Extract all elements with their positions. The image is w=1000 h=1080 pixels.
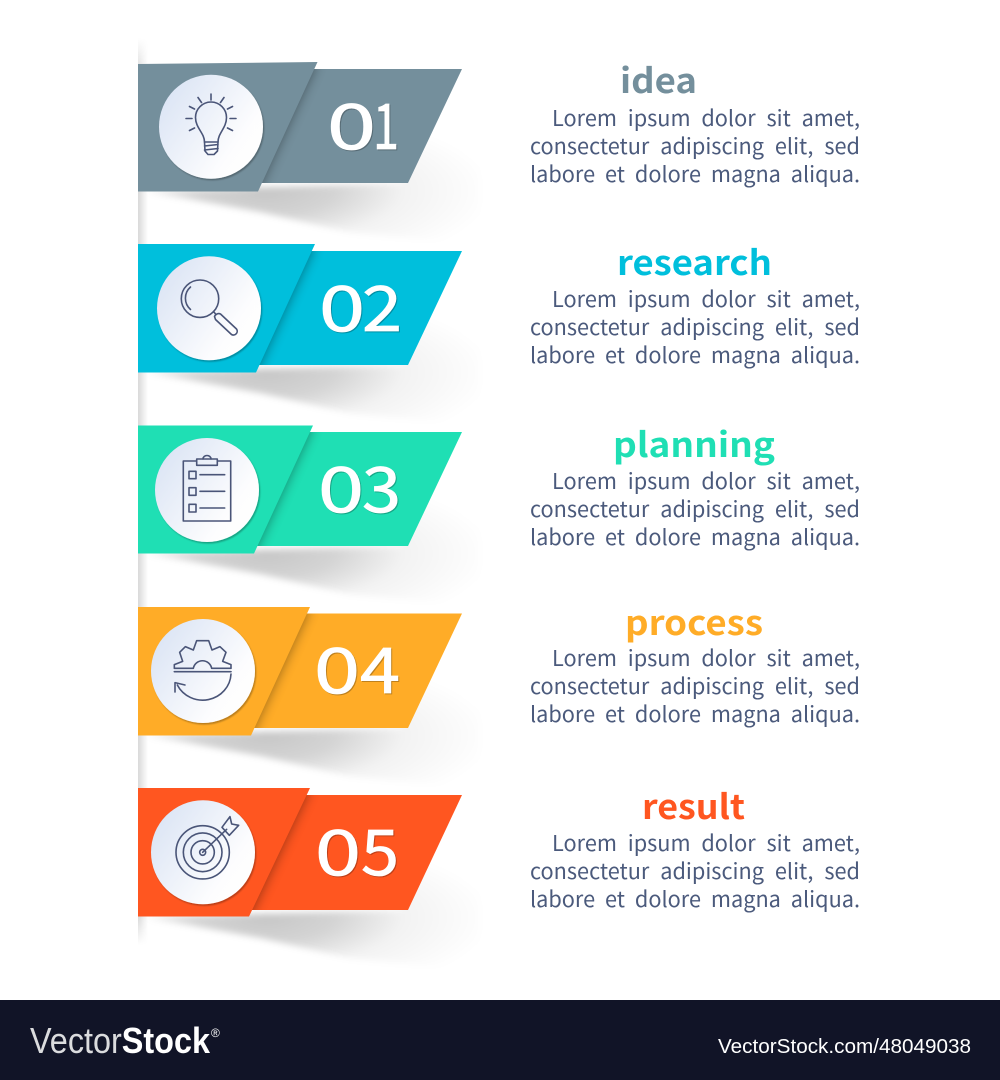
icon: clipboard checklist bbox=[183, 456, 231, 521]
panel: step 05 result bbox=[138, 788, 859, 958]
registered mark: ® bbox=[211, 1026, 220, 1040]
heading: research: research bbox=[617, 236, 772, 285]
fold shadow 01 bbox=[262, 69, 320, 183]
front band 04 bbox=[138, 607, 310, 736]
icon: gear with cycle arrow bbox=[174, 641, 231, 700]
number 04 bbox=[314, 621, 400, 712]
text block 03 bbox=[530, 466, 860, 550]
number 02: 0 bbox=[319, 259, 365, 350]
cast shadow 01 bbox=[145, 125, 480, 245]
panel: step 01 idea bbox=[138, 62, 859, 232]
icon disc 02 bbox=[157, 256, 261, 360]
number 03: 3 bbox=[362, 440, 401, 531]
cast shadow 02 bbox=[145, 307, 480, 426]
text block 05: consectetur adipiscing elit, sed bbox=[530, 854, 860, 886]
text block 02: consectetur adipiscing elit, sed bbox=[530, 310, 860, 342]
front band 03 bbox=[138, 426, 313, 554]
text block 01 bbox=[530, 104, 860, 188]
text block 04: consectetur adipiscing elit, sed bbox=[530, 670, 860, 700]
back band 05 bbox=[240, 795, 462, 910]
number 03 bbox=[318, 440, 401, 531]
text block 01: consectetur adipiscing elit, sed bbox=[530, 130, 860, 160]
text block 04 bbox=[530, 644, 860, 728]
fold shadow 04 bbox=[254, 614, 314, 728]
text block 05 bbox=[530, 828, 860, 912]
number 02 bbox=[319, 259, 402, 350]
number 01: 0 bbox=[327, 77, 376, 168]
icon disc 01 bbox=[159, 75, 263, 179]
heading: result: result bbox=[642, 780, 745, 829]
cast shadow 05 bbox=[145, 852, 480, 971]
icon disc 03 bbox=[155, 438, 259, 542]
number 05: 5 bbox=[361, 803, 399, 894]
icon: target with arrow bbox=[176, 817, 239, 879]
icon: light bulb bbox=[186, 94, 236, 154]
number 03: 0 bbox=[318, 440, 364, 531]
number 04: 4 bbox=[360, 621, 400, 712]
front band 01 bbox=[138, 62, 318, 192]
fold shadow 03 bbox=[258, 432, 317, 546]
back band 02 bbox=[240, 251, 462, 365]
icon: magnifier bbox=[181, 280, 237, 335]
number 05 bbox=[315, 803, 399, 894]
number 02: 2 bbox=[362, 259, 402, 350]
icon disc 05 bbox=[151, 800, 255, 904]
fold shadow 02 bbox=[260, 251, 319, 365]
panel: step 03 planning bbox=[138, 426, 859, 594]
back band 01 bbox=[240, 69, 462, 183]
heading: process: process bbox=[625, 596, 763, 645]
footer logo: VectorStock bbox=[30, 1020, 211, 1061]
fold shadow 05 bbox=[252, 795, 314, 910]
number 01 bbox=[327, 77, 399, 168]
text block 03: consectetur adipiscing elit, sed bbox=[530, 492, 860, 524]
number 01: 1 bbox=[373, 77, 399, 168]
panel: step 04 process bbox=[138, 607, 859, 776]
back band 03 bbox=[240, 432, 462, 546]
footer bar bbox=[0, 1000, 1000, 1080]
front band 02 bbox=[138, 244, 315, 372]
front band 05 bbox=[138, 788, 310, 916]
panel: step 02 research bbox=[138, 244, 859, 412]
text block 02 bbox=[530, 284, 860, 368]
footer url: VectorStock.com/48049038 bbox=[718, 1036, 971, 1058]
back band 04 bbox=[240, 614, 462, 728]
icon disc 04 bbox=[151, 619, 255, 723]
heading: planning: planning bbox=[613, 418, 775, 467]
number 04: 0 bbox=[314, 621, 360, 712]
cast shadow 04 bbox=[145, 670, 480, 789]
heading: idea: idea bbox=[620, 54, 697, 103]
number 05: 0 bbox=[315, 803, 361, 894]
left edge fold shadow bbox=[138, 46, 146, 939]
cast shadow 03 bbox=[145, 488, 480, 607]
